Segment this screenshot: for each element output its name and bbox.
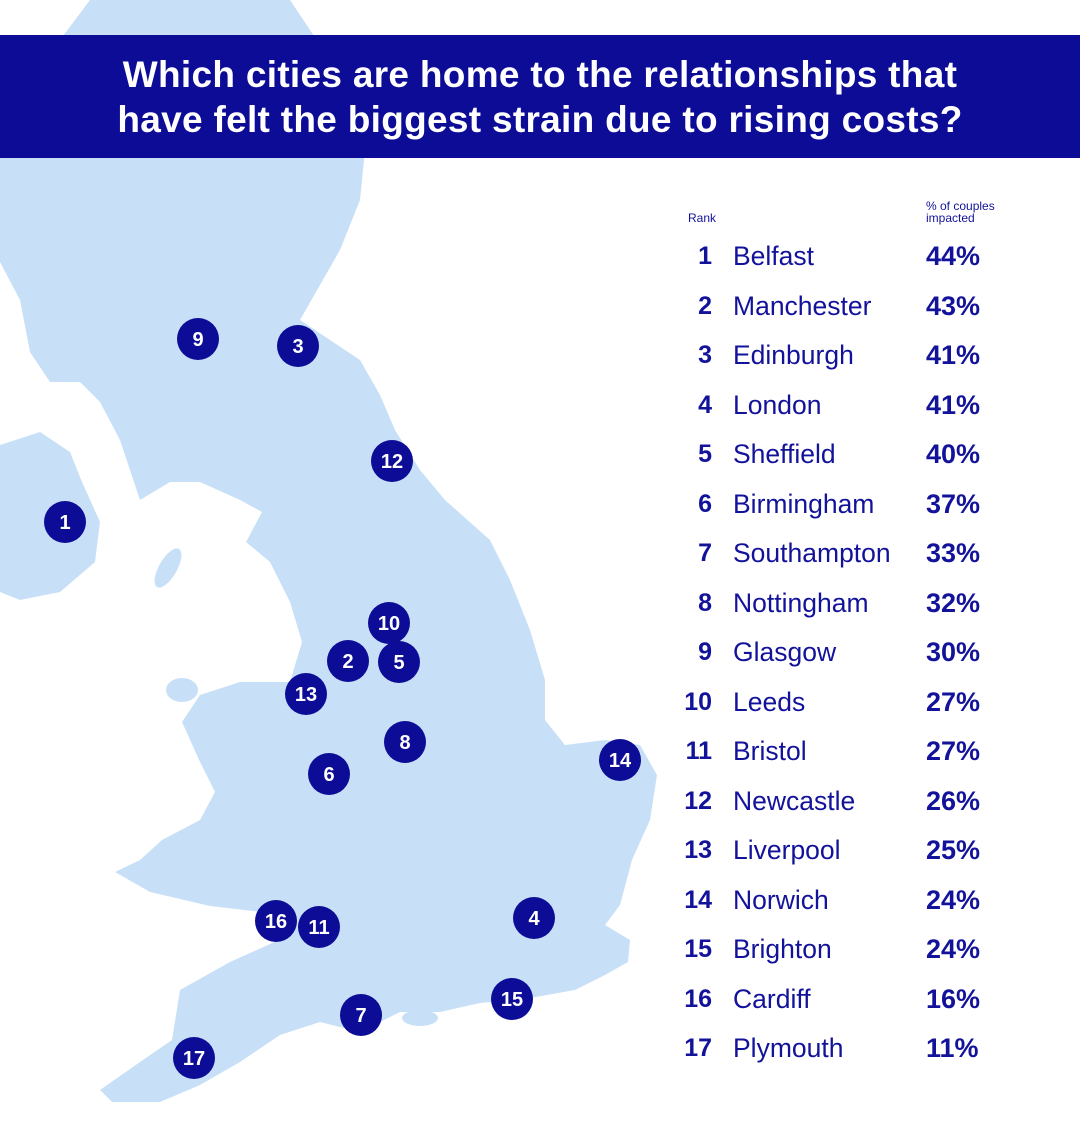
ranking table: Glasgow: [733, 637, 836, 667]
ranking table: 5: [698, 440, 712, 468]
marker: 7 Southampton: [340, 994, 382, 1036]
ranking table: Brighton: [733, 934, 832, 964]
ranking table: Norwich: [733, 885, 829, 915]
table header: rank: Rank: [688, 211, 716, 225]
ranking table: 37%: [926, 489, 980, 519]
ranking table: Bristol: [733, 736, 807, 766]
marker: 11 Bristol: [298, 906, 340, 948]
marker: 3 Edinburgh: 3: [292, 336, 304, 358]
ranking table: 9: [698, 638, 712, 666]
marker: 11 Bristol: 11: [308, 917, 330, 939]
marker: 16 Cardiff: [255, 900, 297, 942]
ranking table: 13: [684, 836, 712, 864]
title banner: Which cities are home to the relationships that: [123, 54, 957, 95]
table header: percentage: % of couples: [926, 199, 995, 213]
ranking table: 1: [698, 242, 712, 270]
ranking table: 3: [698, 341, 712, 369]
marker: 8 Nottingham: 8: [399, 732, 411, 754]
table header: percentage: impacted: [926, 211, 975, 225]
ranking table: 30%: [926, 637, 980, 667]
map: anglesey: [166, 678, 198, 702]
marker: 5 Sheffield: [378, 641, 420, 683]
table header: percentage: [926, 199, 995, 225]
marker: 6 Birmingham: [308, 753, 350, 795]
ranking table: Edinburgh: [733, 340, 854, 370]
marker: 15 Brighton: 15: [501, 989, 523, 1011]
marker: 14 Norwich: 14: [609, 750, 632, 772]
ranking table: 16%: [926, 984, 980, 1014]
ranking table: 40%: [926, 439, 980, 469]
marker: 4 London: [513, 897, 555, 939]
ranking table: 8: [698, 589, 712, 617]
ranking table: 26%: [926, 786, 980, 816]
marker: 16 Cardiff: 16: [265, 911, 287, 933]
ranking table: Nottingham: [733, 588, 869, 618]
ranking table: 12: [684, 787, 712, 815]
ranking table: Belfast: [733, 241, 814, 271]
ranking table: 32%: [926, 588, 980, 618]
marker: 15 Brighton: [491, 978, 533, 1020]
ranking table: London: [733, 390, 821, 420]
marker: 4 London: 4: [528, 908, 540, 930]
ranking table: 33%: [926, 538, 980, 568]
map: ireland: [0, 432, 100, 600]
marker: 9 Glasgow: [177, 318, 219, 360]
marker: 10 Leeds: 10: [378, 613, 400, 635]
marker: 3 Edinburgh: [277, 325, 319, 367]
ranking table: 17: [684, 1034, 712, 1062]
marker: 12 Newcastle: 12: [381, 451, 403, 473]
ranking table: 27%: [926, 687, 980, 717]
marker: 9 Glasgow: 9: [192, 329, 204, 351]
title banner: have felt the biggest strain due to rising costs?: [117, 99, 963, 140]
marker: 2 Manchester: [327, 640, 369, 682]
marker: 1 Belfast: [44, 501, 86, 543]
ranking table: 11: [686, 737, 712, 765]
ranking table: 15: [684, 935, 712, 963]
ranking table: Sheffield: [733, 439, 836, 469]
marker: 1 Belfast: 1: [59, 512, 71, 534]
ranking table: Birmingham: [733, 489, 874, 519]
marker: 5 Sheffield: 5: [393, 652, 405, 674]
title banner: [0, 35, 1080, 158]
ranking table: Plymouth: [733, 1033, 843, 1063]
map: great britain: [0, 0, 657, 1102]
marker: 13 Liverpool: [285, 673, 327, 715]
ranking table: 6: [698, 490, 712, 518]
marker: 12 Newcastle: [371, 440, 413, 482]
marker: 17 Plymouth: 17: [183, 1048, 205, 1070]
ranking table: 14: [684, 886, 712, 914]
ranking table: 2: [698, 292, 712, 320]
ranking table: 10: [684, 688, 712, 716]
marker: 17 Plymouth: [173, 1037, 215, 1079]
ranking table: Newcastle: [733, 786, 855, 816]
ranking table: Southampton: [733, 538, 891, 568]
marker: 2 Manchester: 2: [342, 651, 354, 673]
ranking table: 43%: [926, 291, 980, 321]
marker: 13 Liverpool: 13: [295, 684, 317, 706]
ranking table: 4: [698, 391, 712, 419]
ranking table: 24%: [926, 934, 980, 964]
ranking table: 41%: [926, 390, 980, 420]
ranking table: Leeds: [733, 687, 805, 717]
ranking table: 24%: [926, 885, 980, 915]
map: isle of wight: [402, 1010, 438, 1026]
ranking table: 16: [684, 985, 712, 1013]
ranking table: Cardiff: [733, 984, 811, 1014]
marker: 14 Norwich: [599, 739, 641, 781]
ranking table: 41%: [926, 340, 980, 370]
marker: 7 Southampton: 7: [355, 1005, 367, 1027]
ranking table: Liverpool: [733, 835, 841, 865]
marker: 6 Birmingham: 6: [323, 764, 335, 786]
map: isle of man: [149, 544, 187, 592]
ranking table: 25%: [926, 835, 980, 865]
ranking table: 44%: [926, 241, 980, 271]
marker: 8 Nottingham: [384, 721, 426, 763]
marker: 10 Leeds: [368, 602, 410, 644]
ranking table: 7: [698, 539, 712, 567]
ranking table: 11%: [926, 1033, 979, 1063]
ranking table: Manchester: [733, 291, 871, 321]
ranking table: 27%: [926, 736, 980, 766]
